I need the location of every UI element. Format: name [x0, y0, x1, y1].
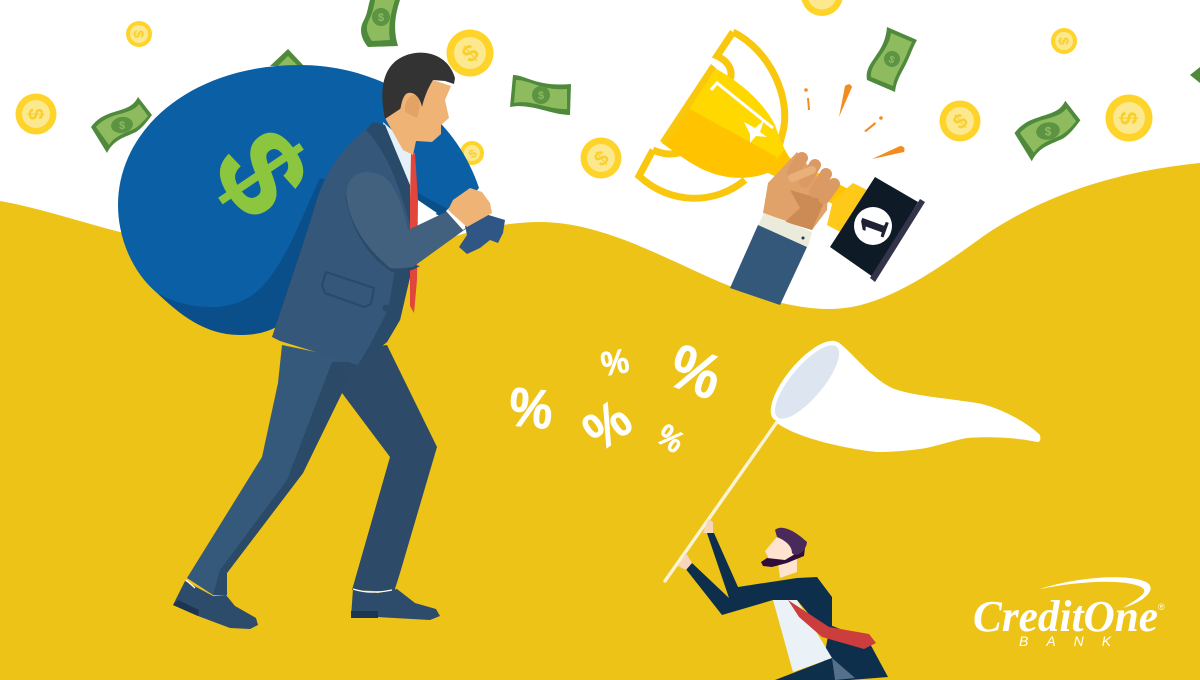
cuff button [802, 236, 804, 240]
cup highlight [711, 83, 773, 128]
banknote top centre [361, 0, 400, 47]
right shoe sole [351, 611, 378, 618]
logo bank label: BANK [1019, 633, 1129, 649]
spark lines [804, 84, 904, 159]
net hoop [759, 330, 853, 432]
suit sleeve [730, 225, 807, 305]
coin small right: $ [1056, 37, 1072, 45]
jacket and arms [685, 533, 832, 632]
trouser [775, 658, 835, 680]
left leg [187, 345, 355, 595]
coin small right [1051, 28, 1077, 54]
Credit One Bank logo [973, 577, 1165, 649]
neck [778, 560, 797, 578]
banknote right [1015, 101, 1080, 161]
coin top edge [801, 0, 843, 16]
trophy base [827, 183, 867, 233]
left shoe [173, 581, 258, 629]
net hoop inner [765, 336, 849, 428]
coin top left: $ [24, 108, 46, 120]
beard and back hair [761, 548, 805, 567]
coin centre: $ [590, 146, 614, 171]
banknote above flag: $ [887, 54, 896, 67]
percent sign 3: % [660, 330, 731, 413]
trophy stem [766, 150, 850, 205]
jacket collar [366, 122, 410, 225]
number badge: 1 [851, 210, 897, 242]
man carrying bag [173, 53, 505, 629]
coin right of flag [940, 100, 980, 142]
left leg shadow [213, 362, 355, 595]
logo swoosh [1040, 577, 1151, 608]
cinched bag neck [459, 213, 505, 254]
net pole [665, 422, 777, 581]
coin behind bag [460, 141, 484, 165]
red tie [410, 153, 418, 313]
coin far right [1106, 94, 1152, 142]
banknote right: $ [1045, 124, 1052, 138]
hand holding trophy [763, 152, 828, 230]
banknote centre: $ [538, 90, 544, 102]
ear [405, 95, 420, 118]
white shirt [383, 122, 412, 200]
dollar sign on bag: $ [187, 107, 336, 239]
jacket [272, 124, 411, 365]
logo name: CreditOne [973, 592, 1158, 641]
coin top left [16, 94, 56, 134]
left sock [186, 580, 195, 588]
coin far right: $ [1114, 111, 1142, 125]
jacket button [382, 304, 390, 312]
butterfly net [665, 330, 1040, 581]
bag neck shading [417, 192, 455, 216]
banknote left of bag: $ [119, 120, 125, 132]
coin beside head: $ [457, 39, 485, 68]
bag shadow [155, 175, 345, 335]
left shoe sole [173, 600, 199, 616]
coin right of flag: $ [949, 109, 973, 134]
coin small top: $ [131, 30, 147, 38]
banknote left of bag [91, 97, 152, 153]
hair [775, 528, 807, 555]
banknote top behind bag [270, 49, 304, 66]
flag edge bar [870, 199, 925, 282]
right sock [353, 589, 392, 592]
coat tail [820, 625, 888, 680]
face [765, 537, 797, 565]
red tie [788, 600, 876, 649]
trophy and hand [639, 32, 925, 305]
trophy cup lower shade [662, 108, 777, 178]
net bag [777, 342, 1040, 452]
trophy cup [662, 68, 788, 178]
flag plate [830, 177, 918, 277]
sleeve shadow [345, 195, 420, 273]
banknote right edge [1190, 67, 1200, 83]
coat lining [825, 658, 855, 680]
banknote above flag [867, 27, 917, 92]
percent symbols [507, 330, 731, 462]
trophy rim [660, 64, 716, 145]
trophy handles [639, 32, 785, 198]
thumb [792, 170, 812, 178]
star sparkle [744, 120, 767, 143]
right leg [342, 345, 437, 592]
percent sign 2: % [598, 342, 632, 383]
shirt cuff [446, 208, 467, 230]
percent sign 4: % [572, 388, 642, 462]
logo registered mark: ® [1158, 602, 1165, 612]
coin small top [126, 21, 152, 47]
sleeve [347, 172, 467, 268]
jacket front shadow [358, 265, 411, 365]
yellow wave background [0, 163, 1200, 680]
money bag [118, 65, 479, 335]
percent sign 1: % [507, 377, 555, 441]
shirt [773, 600, 832, 672]
banknote top centre: $ [378, 12, 384, 24]
small man with net [678, 519, 888, 680]
hand shadow [785, 190, 825, 230]
neck and face [385, 80, 451, 155]
banknote centre [510, 75, 571, 115]
shirt cuff [758, 213, 812, 247]
fingers [793, 158, 834, 198]
coin beside head [446, 30, 494, 76]
jacket pocket [322, 272, 374, 307]
right shoe [351, 589, 440, 620]
percent sign 5: % [650, 418, 690, 460]
hand on bag [448, 188, 492, 227]
bag body [118, 65, 479, 307]
coin behind bag: $ [466, 146, 480, 161]
hair [382, 53, 455, 119]
hands [678, 519, 713, 570]
shirt below arm [410, 196, 437, 230]
coin centre [580, 138, 622, 178]
